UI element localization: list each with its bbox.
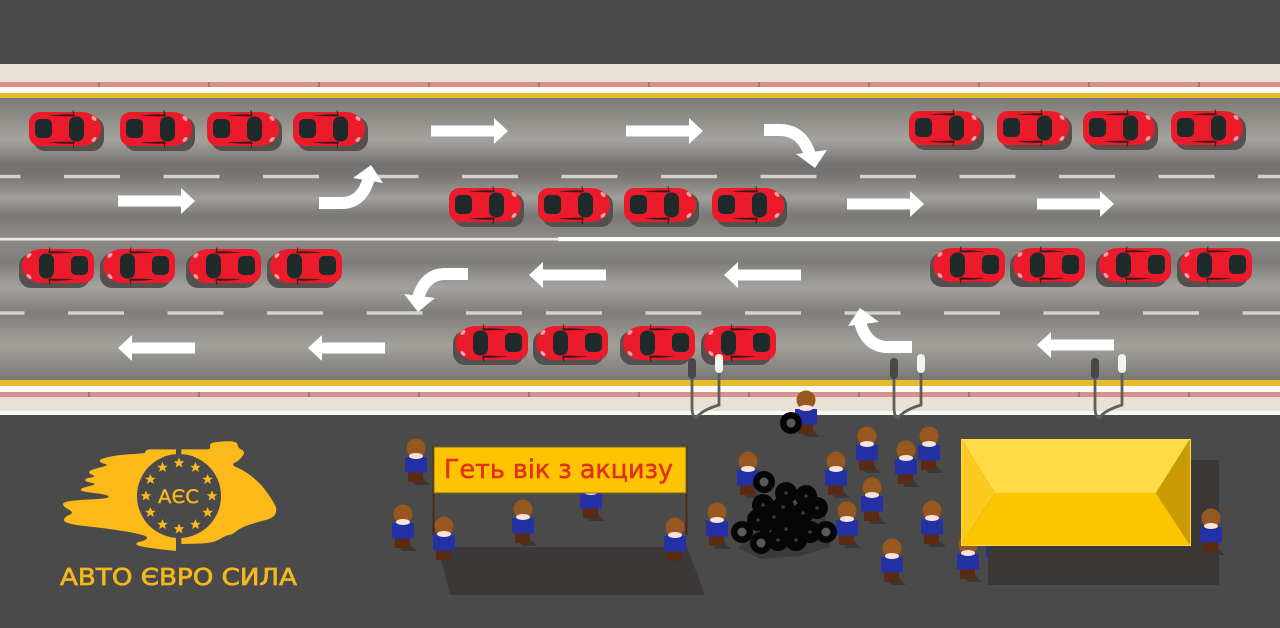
banner slogan: Геть вік з акцизу	[444, 455, 673, 485]
tire pile shadow	[738, 500, 830, 559]
lane markings	[0, 176, 1280, 313]
logo stars	[141, 458, 217, 534]
tires	[731, 471, 837, 554]
protesters	[392, 390, 1225, 585]
cars: upper lanes heading right	[29, 110, 1246, 227]
tire carried by protester	[780, 412, 802, 434]
lanes	[0, 98, 1280, 380]
tire pile	[731, 471, 837, 559]
curved arrow: lane change up-left	[848, 308, 912, 347]
banner board	[434, 447, 686, 493]
logo: Авто Євро Сила	[60, 441, 297, 591]
curved arrow: lane change down-left	[404, 274, 468, 312]
protesters behind banner and roof	[580, 474, 1110, 582]
logo monogram: АЄС	[158, 486, 199, 508]
protest banner	[434, 446, 686, 535]
yellow tent roof	[961, 439, 1190, 546]
curved arrow: lane change down	[764, 130, 827, 168]
cars: lower lanes heading left	[19, 246, 1252, 365]
logo circle	[137, 454, 221, 538]
banner poles	[434, 446, 686, 535]
bottom kerb	[0, 380, 1280, 415]
road with four lanes	[0, 64, 1280, 415]
straight arrows heading right	[118, 118, 1114, 217]
logo wordmark: АВТО ЄВРО СИЛА	[60, 565, 297, 591]
top kerb	[0, 64, 1280, 98]
banner shadow	[438, 547, 705, 595]
logo paint splash	[63, 441, 276, 551]
straight arrows heading left	[118, 262, 1114, 361]
curved arrow: lane change up	[319, 165, 383, 203]
roof shadow	[988, 460, 1219, 585]
bollards with cables	[688, 354, 1126, 418]
